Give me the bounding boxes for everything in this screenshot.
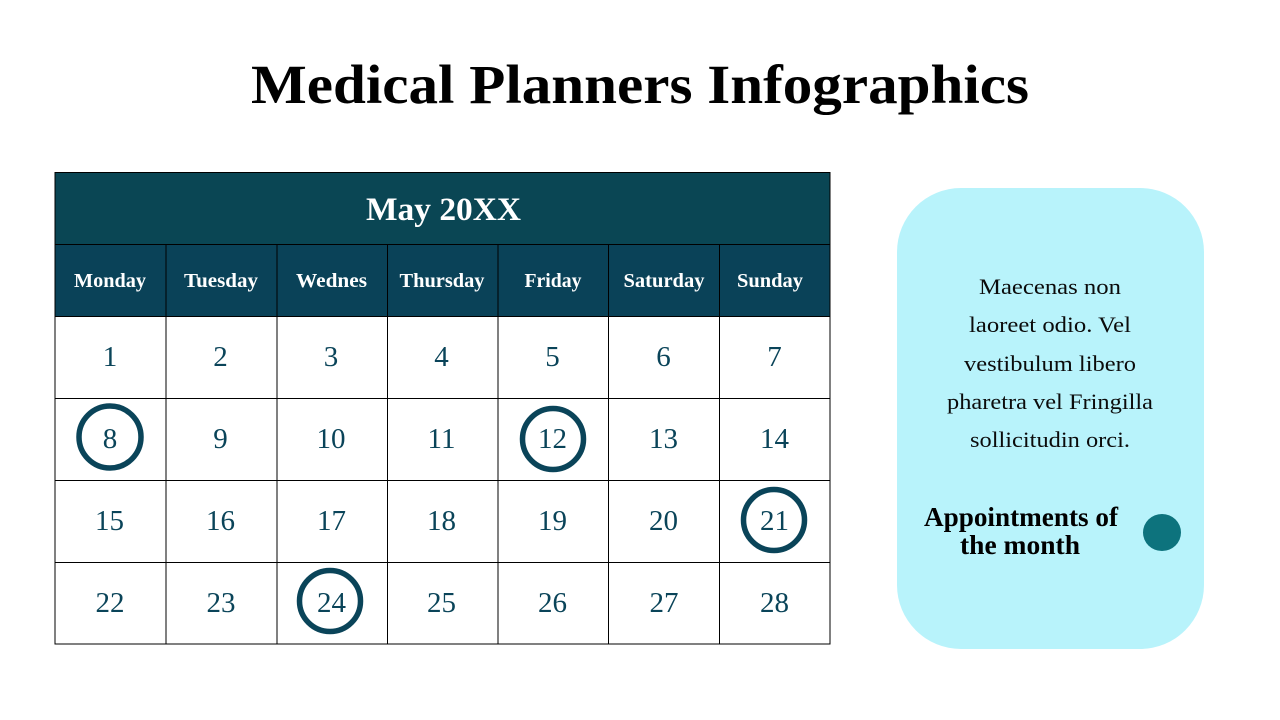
month header: May 20XX — [366, 192, 521, 228]
date numbers: 18 — [427, 505, 456, 537]
appointments label: Appointments of — [924, 502, 1119, 532]
date numbers: 22 — [96, 587, 124, 619]
appointments label — [924, 502, 1119, 560]
date numbers: 28 — [760, 587, 789, 619]
description text — [947, 274, 1153, 452]
weekday header: Wednes — [296, 270, 367, 292]
date numbers: 26 — [538, 587, 567, 619]
legend dot — [1143, 514, 1181, 551]
appointments label: the month — [960, 530, 1080, 560]
date numbers: 15 — [95, 505, 124, 537]
description text: sollicitudin orci. — [970, 427, 1130, 452]
month header — [55, 172, 830, 244]
date numbers: 3 — [324, 341, 338, 373]
weekday header — [55, 244, 830, 316]
date numbers: 4 — [434, 341, 449, 373]
weekday header: Friday — [524, 270, 582, 292]
date numbers: 9 — [213, 423, 228, 455]
highlighted date circle: 12 — [522, 408, 584, 470]
date numbers: 25 — [427, 587, 456, 619]
description text: pharetra vel Fringilla — [947, 389, 1153, 414]
date numbers: 7 — [767, 341, 782, 373]
highlighted date circle: 8 — [79, 406, 141, 468]
description text: vestibulum libero — [964, 351, 1136, 376]
date numbers: 16 — [206, 505, 235, 537]
date numbers: 14 — [760, 423, 790, 455]
date numbers: 2 — [213, 341, 228, 373]
weekday header: Saturday — [624, 270, 704, 292]
date numbers: 24 — [317, 587, 346, 619]
weekday header: Tuesday — [184, 270, 258, 292]
calendar — [55, 172, 830, 644]
date numbers: 27 — [650, 587, 678, 619]
date numbers: 13 — [649, 423, 678, 455]
description text: Maecenas non — [979, 274, 1121, 299]
date numbers: 21 — [760, 505, 789, 537]
date numbers: 19 — [538, 505, 567, 537]
date numbers: 1 — [103, 341, 117, 373]
date numbers: 11 — [428, 423, 455, 455]
date numbers: 17 — [317, 505, 346, 537]
panel: appointments — [897, 188, 1204, 649]
weekday header: Thursday — [400, 270, 484, 292]
date numbers: 23 — [206, 587, 236, 619]
date numbers: 20 — [649, 505, 678, 537]
date numbers: 5 — [545, 341, 560, 373]
description text: laoreet odio. Vel — [969, 312, 1131, 337]
date numbers: 6 — [656, 341, 671, 373]
date numbers — [95, 341, 790, 619]
date numbers: 8 — [103, 423, 117, 455]
highlighted date circle: 21 — [744, 490, 804, 550]
highlighted date circle: 24 — [300, 570, 360, 632]
weekday header: Sunday — [737, 270, 803, 292]
date numbers: 10 — [316, 423, 346, 455]
title: Medical Planners Infographics — [251, 54, 1029, 115]
weekday header: Monday — [74, 270, 146, 292]
date numbers: 12 — [538, 423, 567, 455]
